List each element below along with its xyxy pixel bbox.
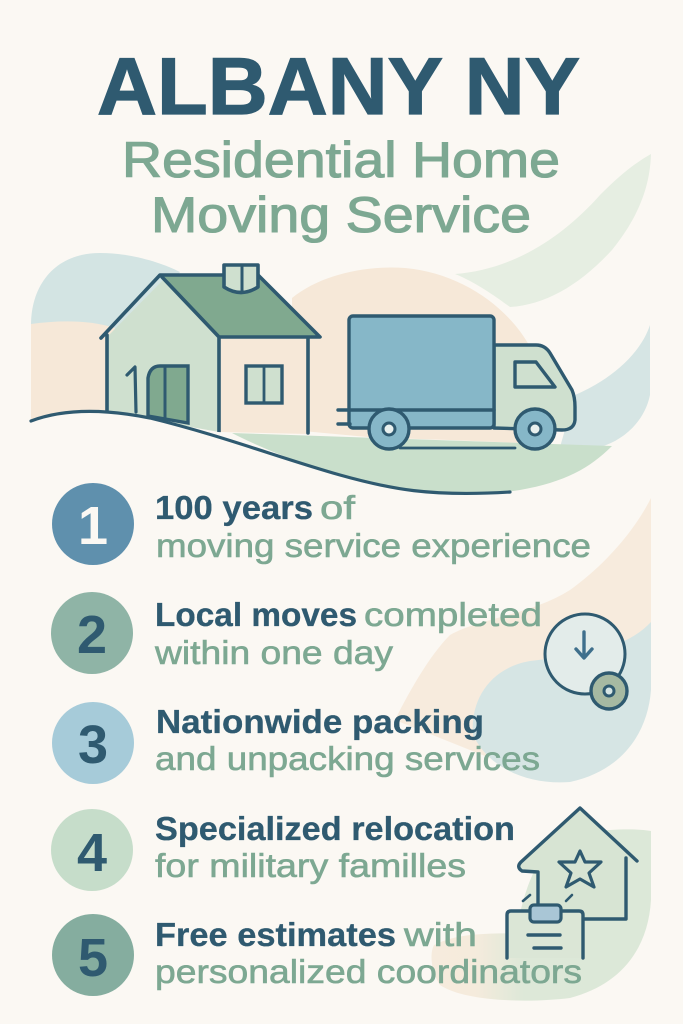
truck window — [515, 362, 555, 387]
item 5 text: Free estimates — [155, 916, 396, 953]
item 3 text: and unpacking services — [155, 740, 540, 777]
truck — [338, 316, 575, 449]
item 2 — [51, 592, 542, 674]
background swoosh: top right — [455, 154, 651, 307]
item 2 text: completed — [364, 596, 542, 633]
chimney — [224, 265, 258, 292]
clipboard — [507, 911, 583, 958]
item 5 text: with — [403, 916, 477, 953]
background blob: left peach — [31, 321, 115, 421]
window — [246, 366, 282, 403]
badge 2: 2 — [77, 605, 107, 665]
door number — [127, 367, 136, 412]
background blob: lower right green and peach wash — [432, 829, 651, 1001]
item 1 text: 100 years — [155, 489, 313, 526]
item 2 text: Local moves — [155, 596, 357, 633]
badge 1: 1 — [78, 496, 108, 556]
subtitle: Moving Service — [151, 187, 531, 243]
ground hill — [31, 412, 612, 494]
item 1 text: moving service experience — [156, 527, 591, 564]
background swoosh: right blue — [560, 325, 650, 447]
item 3 text — [155, 703, 540, 777]
item 2 text: within one day — [154, 634, 394, 671]
item 1 — [52, 483, 591, 565]
badge 4 — [51, 809, 133, 891]
badge 5 — [52, 914, 134, 996]
item 4 text: for military familles — [155, 847, 466, 884]
subtitle: Residential Home — [122, 132, 560, 188]
item 5 — [52, 914, 582, 996]
front wheel — [515, 409, 555, 449]
badge 2 — [51, 592, 133, 674]
item 5 text: personalized coordinators — [155, 953, 582, 990]
badge 4: 4 — [77, 823, 107, 883]
item 1 text — [155, 489, 591, 564]
item 3 — [52, 702, 540, 784]
icon: clock — [545, 614, 627, 709]
badge 1 — [52, 483, 134, 565]
door — [148, 366, 188, 423]
badge 3 — [52, 702, 134, 784]
badge 3: 3 — [78, 715, 108, 775]
icon: house with star and clipboard — [507, 808, 637, 958]
rear wheel — [369, 409, 409, 449]
item 2 text — [154, 596, 542, 671]
house — [101, 265, 320, 434]
badge 5: 5 — [78, 928, 108, 988]
title: ALBANY NY — [97, 42, 580, 132]
illustration: house and truck — [31, 265, 612, 494]
background blob: left blue — [31, 253, 180, 330]
item 5 text — [155, 916, 582, 990]
background blob: peach behind truck — [292, 267, 550, 445]
item 3 text: Nationwide packing — [156, 703, 484, 740]
subtitle — [122, 132, 560, 243]
item 1 text: of — [320, 489, 356, 526]
background blob: lower right blue — [473, 622, 651, 782]
item 4 text — [155, 810, 515, 884]
item 4 text: Specialized relocation — [155, 810, 515, 847]
item 4 — [51, 809, 515, 891]
background blob: lower right peach — [395, 498, 651, 770]
